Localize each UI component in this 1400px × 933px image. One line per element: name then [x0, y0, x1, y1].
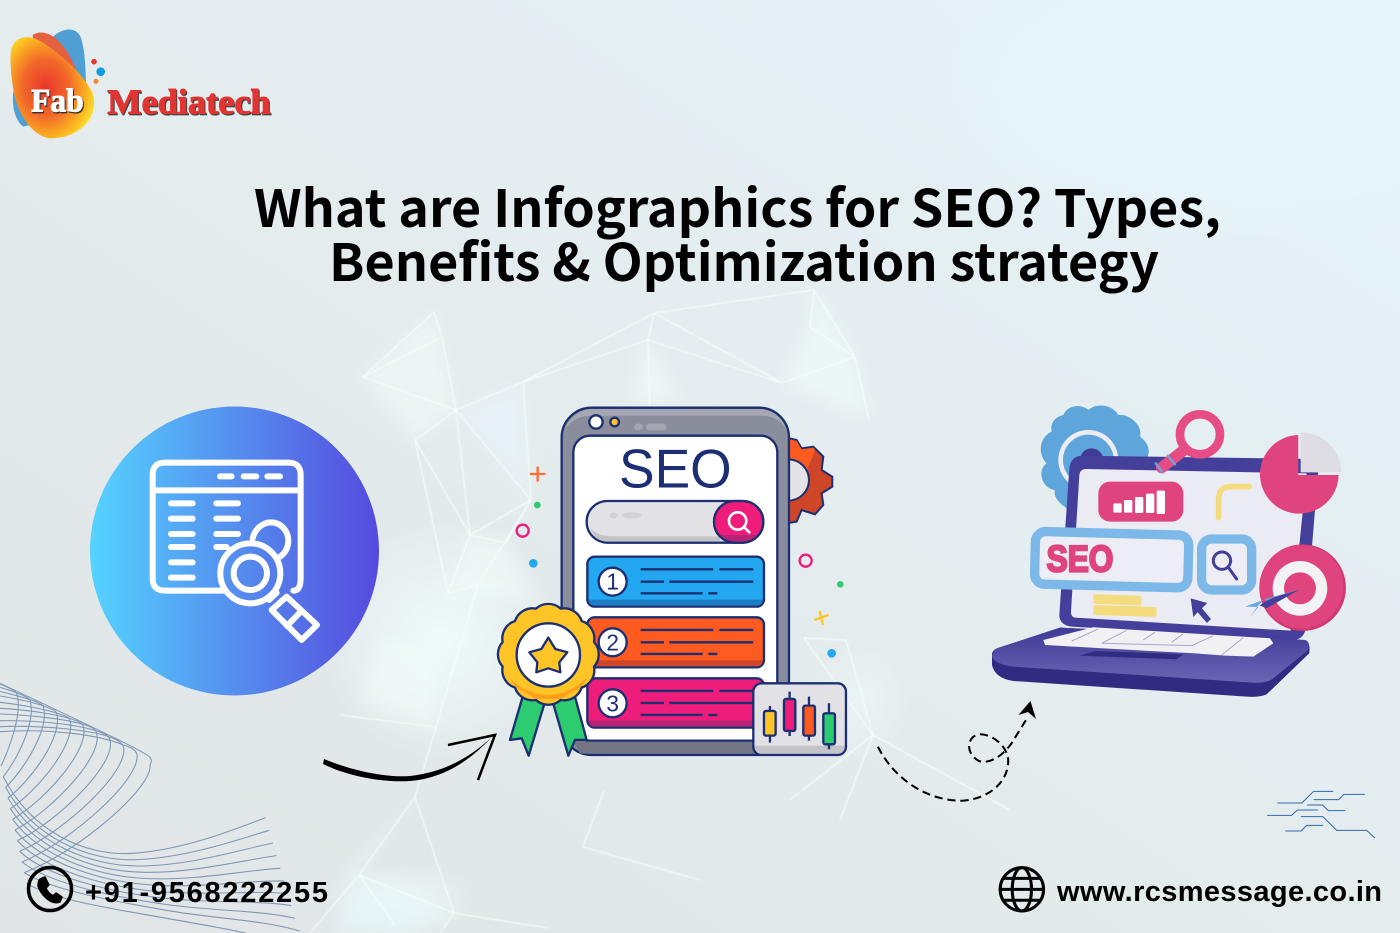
logo icon blob: [11, 30, 105, 138]
search field with SEO: SEO: [1047, 539, 1113, 580]
blue gear: [1041, 405, 1149, 508]
phone number: +91-9568222255: [85, 877, 328, 909]
SEO heading: SEO: [619, 438, 732, 500]
candlestick card: [753, 683, 846, 755]
website contact: [1000, 868, 1382, 911]
laptop base: [992, 628, 1310, 697]
pink magnifier: [1156, 414, 1220, 472]
title: [254, 167, 1221, 296]
yellow text bars: [1093, 594, 1157, 617]
result row 3: [587, 678, 764, 728]
target with dart: [1245, 544, 1346, 631]
signal chip: [1098, 482, 1183, 522]
yellow corner: [1219, 487, 1249, 518]
curved arrow to phone: [323, 735, 495, 781]
pie chart: [1260, 432, 1341, 514]
logo word Fab: Fab: [31, 84, 84, 120]
laptop screen: [1059, 456, 1318, 640]
logo: Fab Mediatech: [11, 30, 271, 138]
SEO phone illustration: [498, 408, 846, 756]
icon: globe: [1000, 868, 1044, 911]
SEO laptop illustration: [992, 405, 1346, 697]
cursor: [1191, 598, 1211, 623]
icon: table search disc: [90, 406, 379, 696]
title: Benefits & Optimization strategy: [329, 221, 1159, 296]
gear: [768, 438, 832, 523]
phone body: [562, 408, 789, 755]
logo word Mediatech: Mediatech: [107, 83, 271, 121]
result row 3: 3: [606, 690, 619, 716]
sparkle decorations: [517, 467, 844, 658]
icon: phone: [28, 868, 72, 910]
title: What are Infographics for SEO? Types,: [254, 167, 1221, 242]
award badge: [498, 604, 599, 756]
decorative circuit lines: [1267, 791, 1375, 838]
search field with SEO: [1034, 531, 1189, 588]
phone contact: [28, 868, 328, 910]
decorative wave lines: [0, 683, 300, 933]
result row 2: 2: [606, 629, 619, 655]
website url: www.rcsmessage.co.in: [1056, 876, 1382, 908]
result row 1: 1: [606, 569, 619, 595]
search button: [1202, 539, 1252, 590]
keyboard keys: [1043, 627, 1273, 657]
result row 2: [587, 617, 764, 667]
search bar: [587, 501, 763, 543]
dashed arrow to laptop: [878, 701, 1036, 801]
result row 1: [587, 557, 764, 607]
